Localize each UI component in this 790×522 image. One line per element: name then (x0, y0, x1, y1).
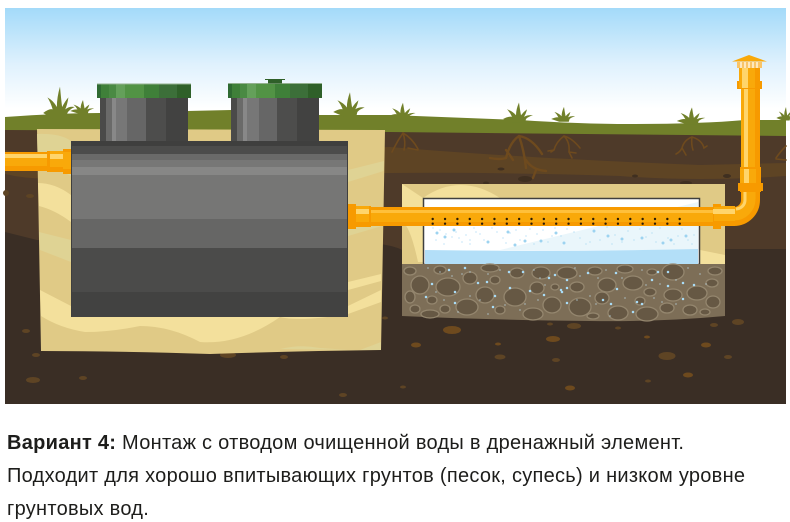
sand pit around tank (37, 129, 385, 354)
drainage element sand (402, 184, 725, 265)
caption line 3: грунтовых вод. (7, 498, 149, 520)
illustration: septic tank with drainage element (3, 8, 790, 404)
caption line 1: Вариант 4: Монтаж с отводом очищенной воды в дренажный элемент. (7, 432, 684, 454)
vent cap (732, 55, 767, 89)
gravel layer with stones and water drops (402, 264, 725, 321)
tank body (71, 141, 348, 317)
right neck and green lid (228, 79, 322, 141)
caption line 2: Подходит для хорошо впитывающих грунтов (песок, супесь) и низком уровне (7, 465, 745, 487)
caption text (7, 432, 745, 520)
elbow and vent riser pipe (713, 88, 763, 229)
outlet pipe with perforation (348, 204, 713, 229)
perforation holes (433, 219, 692, 224)
soil layers (5, 125, 786, 404)
soil pebbles (3, 168, 744, 397)
grass tufts (43, 87, 790, 124)
left inlet pipe (5, 149, 71, 174)
plant roots (392, 133, 786, 178)
drainage chamber with water (424, 198, 700, 264)
green grass band (5, 110, 786, 136)
left neck and green lid (97, 84, 191, 141)
sky (5, 8, 786, 120)
